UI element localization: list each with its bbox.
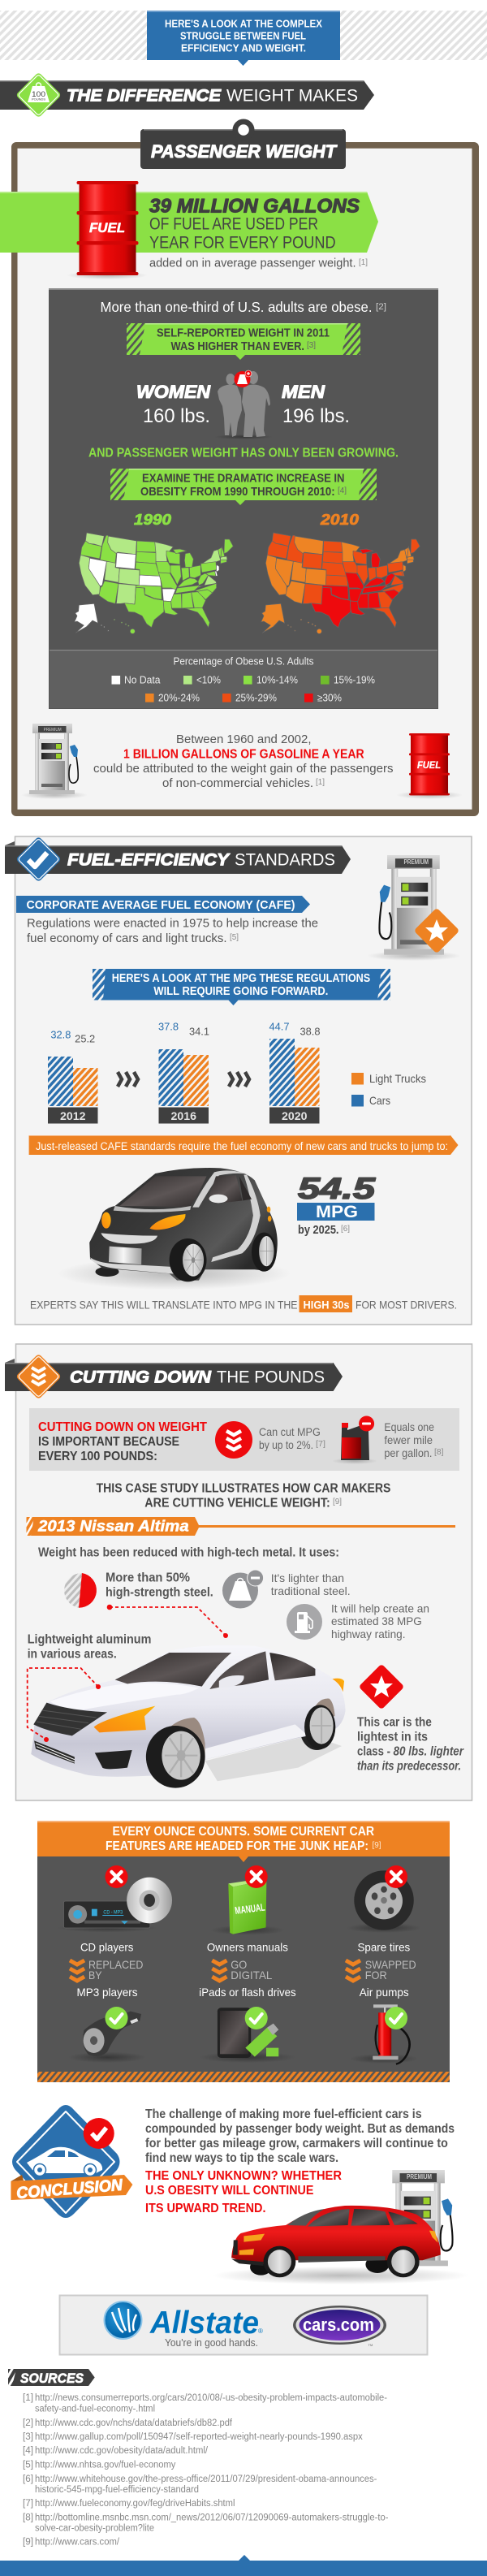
bars: 2012: 25.2 (75, 1033, 95, 1044)
illustration: black compact car (58, 1168, 291, 1290)
top striped band with intro box: STRUGGLE BETWEEN FUEL (180, 30, 306, 42)
sources list: http://www.fueleconomy.gov/feg/driveHabits.shtml (35, 2499, 235, 2509)
text: lightweight aluminum: in various areas. (28, 1647, 117, 1661)
bars: 2016: 2016 (170, 1109, 196, 1122)
text: lightweight aluminum: Lightweight aluminum (28, 1632, 151, 1646)
stat: 54.5 MPG: [6] (341, 1225, 350, 1234)
sources list (23, 2393, 389, 2547)
stat: men weight: MEN (282, 382, 325, 402)
badge: conclusion: CONCLUSION (15, 2176, 123, 2202)
icon: couple silhouette with weight badge (214, 370, 273, 439)
legend: percentage of obese adults: 20%-24% (158, 692, 200, 703)
icon: fuel can with minus (332, 1416, 377, 1464)
legend: bar chart: Light Trucks (369, 1072, 426, 1085)
sources list: http://www.cdc.gov/nchs/data/databriefs/db82.pdf (35, 2418, 233, 2428)
tag: 2013 Nissan Altima: 2013 Nissan Altima (37, 1519, 189, 1536)
bars: 2016 (158, 1022, 209, 1124)
footer bar (0, 2555, 487, 2576)
text: lighter than steel (271, 1571, 351, 1597)
illustration: red car at gas pump (213, 2170, 469, 2284)
heading: the difference weight makes (0, 72, 374, 118)
sponsor logos panel (60, 2295, 427, 2355)
sources tag: SOURCES (20, 2371, 84, 2386)
text: equals one fewer mile: fewer mile (384, 1433, 433, 1446)
heading: cutting down the pounds: CUTTING DOWN (70, 1368, 212, 1387)
text: lightest in class: lightest in its (357, 1730, 428, 1744)
text: cutting down on weight (38, 1420, 207, 1463)
text: 38 MPG rating: It will help create an (331, 1601, 429, 1614)
text: lighter than steel: It's lighter than (271, 1571, 344, 1584)
text: lightest in class (357, 1715, 464, 1773)
label: 2010: 2010 (320, 512, 359, 528)
stat: 54.5 MPG (297, 1171, 376, 1237)
heading: every ounce counts: FEATURES ARE HEADED FOR THE JUNK HEAP: (106, 1839, 368, 1853)
bars: 2020 (269, 1022, 321, 1124)
connector: go digital: GO (231, 1958, 247, 1971)
stat: women weight (136, 382, 211, 427)
icon: spare tire removed (385, 1865, 407, 1888)
heading: cutting down the pounds (5, 1354, 343, 1399)
icon: gas pump with star (367, 855, 461, 961)
text: 1 billion gallons: of non-commercial vehicles. (162, 777, 313, 790)
text: experts high 30s (30, 1295, 457, 1312)
legend: percentage of obese adults (50, 650, 437, 708)
stat: 54.5 MPG: by 2025. (298, 1224, 339, 1237)
text: 1 billion gallons: 1 BILLION GALLONS OF GASOLINE A YEAR (123, 747, 364, 761)
heading: fuel-efficiency standards: FUEL-EFFICIENCY (67, 851, 231, 869)
text: conclusion paragraph: compounded by passenger body weight. But as demands (145, 2122, 455, 2136)
text: can cut MPG (259, 1425, 325, 1451)
bars: 2012 (48, 1030, 97, 1124)
text: the only unknown: THE ONLY UNKNOWN? WHETHER (145, 2169, 342, 2183)
legend: percentage of obese adults: Percentage of Obese U.S. Adults (174, 656, 313, 668)
sources list: solve-car-obesity-problem?lite (35, 2524, 154, 2534)
illustration: red car at gas pump: PREMIUM (407, 2173, 432, 2181)
logo: cars.com (293, 2306, 386, 2347)
text: case study intro: [9] (333, 1498, 342, 1506)
panel: obesity statistics (49, 288, 438, 709)
icon: gas pump (21, 724, 88, 799)
text: equals one fewer mile (384, 1420, 444, 1459)
banner: dramatic increase: EXAMINE THE DRAMATIC INCREASE IN (142, 471, 344, 485)
text: regulations (27, 917, 318, 945)
text: lightweight aluminum (28, 1632, 151, 1661)
sources list: [9] (23, 2537, 33, 2547)
text: case study intro: ARE CUTTING VEHICLE WEIGHT: (144, 1496, 330, 1510)
text: equals one fewer mile: per gallon. (384, 1446, 432, 1459)
text: 1 billion gallons (93, 733, 393, 790)
icon: tablet added (245, 2007, 268, 2029)
sources list: http://www.gallup.com/poll/150947/self-reported-weight-nearly-pounds-1990.aspx (35, 2432, 363, 2442)
text: experts high 30s: HIGH 30s (304, 1299, 350, 1312)
heading: fuel-efficiency standards (5, 836, 351, 882)
text: 38 MPG rating: highway rating. (331, 1627, 406, 1640)
stat: 54.5 MPG: MPG (316, 1203, 358, 1221)
text: lightest in class: class - (357, 1744, 390, 1758)
icon: gas pump with star: PREMIUM (404, 858, 429, 866)
bars: 2012: 32.8 (50, 1030, 71, 1041)
label: spare tires: Spare tires (357, 1941, 410, 1954)
heading: every ounce counts (106, 1825, 381, 1853)
text: cutting down on weight: IS IMPORTANT BECAUSE (38, 1435, 179, 1449)
banner: dramatic increase: OBESITY FROM 1990 THROUGH 2010: (140, 485, 335, 499)
icon: weight with minus (222, 1570, 264, 1608)
tab: passenger weight: PASSENGER WEIGHT (151, 141, 338, 162)
sources list: http://www.cdc.gov/obesity/data/adult.html/ (35, 2446, 209, 2456)
top striped band with intro box (0, 11, 487, 66)
callout: 39 million gallons: [1] (359, 258, 368, 267)
banner: self-reported weight (127, 323, 360, 360)
banner: self-reported weight: [3] (307, 341, 316, 350)
heading: the difference weight makes: WEIGHT MAKES (226, 86, 358, 106)
sources list: [8] (23, 2513, 33, 2522)
panel: cutting down the pounds (5, 1344, 472, 1800)
callout: 39 million gallons: FUEL (89, 220, 125, 236)
text: lightest in class: 80 lbs. lighter (393, 1744, 464, 1758)
icon: CD player removed (106, 1865, 128, 1888)
legend: percentage of obese adults: 10%-14% (256, 674, 298, 685)
legend: percentage of obese adults: 25%-29% (235, 692, 277, 703)
text: equals one fewer mile: [8] (434, 1448, 444, 1457)
icon: tablet and flash drive (200, 2008, 295, 2063)
text: one third obese: [2] (376, 302, 386, 312)
icon: MP3 player (68, 2012, 146, 2063)
icon: air pump (350, 2004, 418, 2064)
connector: replaced by: REPLACED (88, 1958, 143, 1971)
icon: CD player (58, 1878, 172, 1932)
map: obesity 1990 (75, 533, 233, 633)
sources list: [7] (23, 2499, 33, 2509)
label: MP3 players: MP3 players (76, 1986, 138, 1999)
text: high-strength steel: high-strength steel. (106, 1586, 213, 1600)
text: conclusion paragraph: The challenge of making more fuel-efficient cars is (145, 2107, 422, 2121)
sources list: safety-and-fuel-economy-.html (35, 2404, 155, 2414)
banner: self-reported weight: WAS HIGHER THAN EVER. (170, 339, 304, 353)
banner: MPG required: WILL REQUIRE GOING FORWARD. (153, 984, 328, 998)
bars: 2012: 2012 (60, 1109, 86, 1122)
text: case study intro: THIS CASE STUDY ILLUSTRATES HOW CAR MAKERS (97, 1481, 391, 1495)
text: the only unknown: ITS UPWARD TREND. (145, 2202, 266, 2215)
text: conclusion paragraph: for better gas mileage grow, carmakers will continue to (145, 2137, 448, 2150)
banner: just-released CAFE: Just-released CAFE standards require the fuel economy of new cars and trucks to jump to: (36, 1140, 448, 1152)
stat: men weight (282, 382, 350, 427)
banner: MPG required: HERE'S A LOOK AT THE MPG THESE REGULATIONS (112, 971, 370, 985)
label: iPads or flash drives: iPads or flash drives (199, 1986, 296, 1999)
sources list: http://www.cars.com/ (35, 2537, 120, 2547)
logo: Allstate: You're in good hands. (165, 2336, 258, 2349)
connector: go digital (212, 1958, 272, 1982)
arrow: chevrons (229, 1072, 249, 1087)
callout line: high-strength steel (110, 1607, 226, 1636)
heading: fuel-efficiency standards: STANDARDS (235, 851, 335, 869)
heading: every ounce counts: [9] (372, 1841, 381, 1850)
bars: 2016: 34.1 (189, 1027, 209, 1038)
icon: CD player: CD - MP3 (103, 1909, 123, 1916)
text: can cut MPG: by up to 2%. (259, 1438, 313, 1451)
icon: fuel barrel: FUEL (417, 761, 441, 771)
callout dots: aluminum (44, 1684, 101, 1742)
icon: manual book: MANUAL (234, 1901, 265, 1917)
legend: percentage of obese adults: ≥30% (317, 692, 342, 703)
text: experts high 30s: FOR MOST DRIVERS. (356, 1299, 457, 1312)
text: high-strength steel (106, 1571, 213, 1600)
text: regulations: [5] (230, 933, 239, 942)
banner: self-reported weight: SELF-REPORTED WEIGHT IN 2011 (157, 326, 330, 340)
bars: 2020: 38.8 (300, 1027, 321, 1038)
text: lightest in class: This car is the (357, 1715, 432, 1729)
map: obesity 2010 (261, 533, 420, 633)
label: 1990: 1990 (134, 512, 171, 528)
heading: every ounce counts: EVERY OUNCE COUNTS. SOME CURRENT CAR (112, 1825, 374, 1839)
text: 1 billion gallons: could be attributed to the weight gain of the passengers (93, 763, 393, 776)
text: 38 MPG rating: estimated 38 MPG (331, 1614, 422, 1627)
banner: MPG required (93, 969, 390, 1005)
sources list: [2] (23, 2418, 33, 2428)
bar chart: MPG standards (48, 1022, 426, 1124)
banner: dramatic increase: [4] (338, 486, 347, 495)
label: air pumps: Air pumps (360, 1986, 409, 1999)
stat: women weight: WOMEN (136, 382, 211, 402)
sources list: [6] (23, 2474, 33, 2484)
logo: cars.com: cars.com (303, 2315, 374, 2335)
sources list: historic-545-mpg-fuel-efficiency-standard (35, 2485, 199, 2495)
text: the only unknown: U.S OBESITY WILL CONTINUE (145, 2184, 314, 2198)
connector: swapped for: FOR (365, 1969, 387, 1982)
badge: conclusion (11, 2105, 132, 2218)
sources list: [4] (23, 2446, 33, 2456)
text: 1 billion gallons: [1] (316, 778, 325, 787)
text: regulations: fuel economy of cars and light trucks. (27, 931, 227, 945)
connector: replaced by (70, 1958, 143, 1982)
text: cutting down on weight: EVERY 100 POUNDS: (38, 1450, 157, 1463)
sources list: http://www.nhtsa.gov/fuel-economy (35, 2461, 176, 2470)
logo: Allstate (104, 2302, 263, 2349)
text: conclusion paragraph: find new ways to tip the scale wars. (145, 2151, 338, 2165)
tag: 2013 Nissan Altima (26, 1517, 455, 1536)
text: 1 billion gallons: Between 1960 and 2002, (176, 733, 312, 746)
text: 38 MPG rating (331, 1601, 429, 1640)
icon: spare tire (347, 1870, 421, 1933)
panel: fuel-efficiency standards (5, 836, 472, 1325)
icon: half circle 50 percent (64, 1573, 97, 1608)
text: equals one fewer mile: Equals one (384, 1420, 434, 1433)
text: high-strength steel: More than 50% (106, 1571, 190, 1585)
callout: 39 million gallons: 39 MILLION GALLONS (149, 195, 360, 218)
connector: replaced by: BY (88, 1969, 102, 1982)
arrow: chevrons (118, 1072, 138, 1087)
text: high-tech metal: Weight has been reduced with high-tech metal. It uses: (38, 1546, 339, 1560)
panel: every 100 pounds (29, 1408, 459, 1471)
banner: just-released CAFE (29, 1135, 459, 1155)
sources list: http://www.whitehouse.gov/the-press-office/2011/07/29/president-obama-announces- (35, 2474, 377, 2484)
callout line: aluminum (28, 1668, 98, 1740)
sources list: http://bottomline.msnbc.msn.com/_news/2012/06/07/12090069-automakers-struggle-to- (35, 2513, 389, 2522)
text: passenger weight growing: AND PASSENGER WEIGHT HAS ONLY BEEN GROWING. (88, 447, 399, 460)
heading: the difference weight makes: POUNDS (32, 97, 45, 101)
legend: bar chart: Cars (369, 1094, 390, 1107)
stat: 54.5 MPG: 54.5 (298, 1171, 376, 1205)
tab: passenger weight (140, 119, 346, 169)
legend: percentage of obese adults: No Data (124, 674, 161, 685)
sources list: http://news.consumerreports.org/cars/2010/08/-us-obesity-problem-impacts-automobile- (35, 2393, 387, 2403)
callout dots: high-strength steel (107, 1605, 228, 1638)
icon: manual book (210, 1878, 285, 1935)
bars: 2020: 44.7 (269, 1022, 290, 1033)
text: lightest in class: than its predecessor. (357, 1759, 461, 1773)
heading: the difference weight makes: 100 (32, 90, 45, 99)
bars: 2020: 2020 (282, 1109, 308, 1122)
callout: 39 million gallons: YEAR FOR EVERY POUND (149, 234, 336, 252)
icon: air pump added (385, 2007, 407, 2029)
icon: MP3 added (106, 2007, 128, 2029)
label: CD players: CD players (80, 1941, 133, 1954)
callout: 39 million gallons: OF FUEL ARE USED PER (149, 214, 318, 234)
stat: women weight: 160 lbs. (143, 405, 210, 427)
legend: percentage of obese adults: 15%-19% (334, 674, 375, 685)
icon: red down chevrons (215, 1421, 252, 1459)
text: cutting down on weight: CUTTING DOWN ON WEIGHT (38, 1420, 207, 1434)
stat: men weight: 196 lbs. (282, 405, 350, 427)
icon: manual removed (245, 1865, 268, 1888)
text: regulations: Regulations were enacted in 1975 to help increase the (27, 917, 318, 931)
icon: red star diamond (359, 1664, 404, 1709)
icon: gas pump circle (287, 1604, 322, 1640)
heading: the difference weight makes: THE DIFFERENCE (67, 86, 222, 106)
legend: percentage of obese adults: <10% (196, 674, 221, 685)
heading: cutting down the pounds: THE POUNDS (217, 1368, 325, 1387)
icon: gas pump: PREMIUM (44, 728, 62, 733)
banner: CAFE: CORPORATE AVERAGE FUEL ECONOMY (CAFE) (26, 898, 295, 912)
logo: Allstate: Allstate (149, 2306, 259, 2340)
text: can cut MPG: Can cut MPG (259, 1425, 321, 1438)
text: lighter than steel: traditional steel. (271, 1584, 351, 1597)
connector: swapped for: SWAPPED (365, 1958, 416, 1971)
label: owners manuals: Owners manuals (207, 1941, 288, 1954)
text: case study intro (97, 1481, 391, 1510)
connector: swapped for (346, 1958, 416, 1982)
panel: passenger weight (0, 119, 479, 816)
text: the only unknown (145, 2169, 342, 2215)
text: can cut MPG: [7] (316, 1440, 325, 1449)
logo: Allstate: ® (258, 2327, 263, 2335)
banner: dramatic increase (110, 469, 377, 505)
icon: fuel barrel (396, 733, 463, 799)
top striped band with intro box: EFFICIENCY AND WEIGHT. (181, 42, 306, 54)
callout: 39 million gallons (0, 181, 378, 279)
connector: go digital: DIGITAL (231, 1969, 272, 1982)
top striped band with intro box: HERE'S A LOOK AT THE COMPLEX (165, 18, 322, 30)
text: experts high 30s: EXPERTS SAY THIS WILL TRANSLATE INTO MPG IN THE (30, 1299, 297, 1312)
logo: cars.com: TM (368, 2343, 373, 2347)
sources list: [5] (23, 2461, 33, 2470)
panel: junk heap features (37, 1821, 450, 2082)
legend: bar chart (351, 1072, 426, 1107)
sources list: [1] (23, 2393, 33, 2403)
sources list: [3] (23, 2432, 33, 2442)
text: conclusion paragraph (145, 2107, 455, 2165)
callout: 39 million gallons: added on in average passenger weight. (149, 257, 356, 270)
bars: 2016: 37.8 (158, 1022, 179, 1033)
text: one third obese: More than one-third of U.S. adults are obese. (101, 299, 372, 315)
illustration: silver sedan (31, 1645, 346, 1788)
